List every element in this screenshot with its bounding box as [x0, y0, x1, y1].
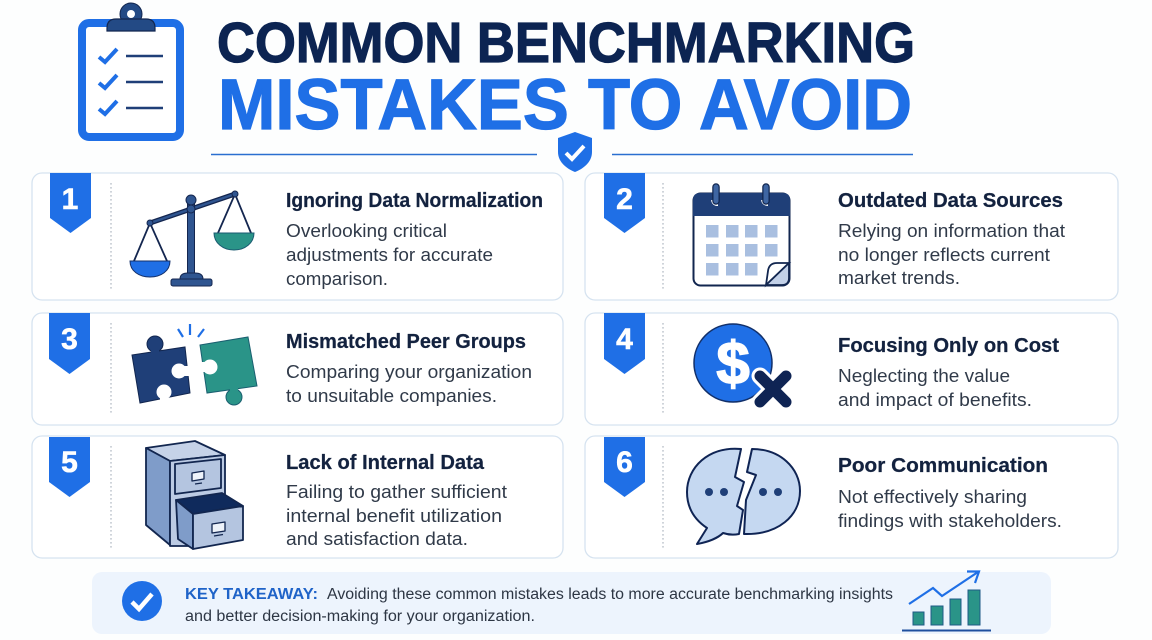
badge 2: 2 [616, 183, 633, 216]
panel: key takeaway [92, 572, 1051, 634]
icon: calendar [693, 187, 790, 286]
icon: clipboard checklist [82, 3, 180, 137]
title [217, 11, 915, 145]
text: key takeaway: and better decision-making for your organization. [185, 608, 535, 625]
title: COMMON BENCHMARKING [217, 11, 915, 75]
badge 2 [604, 173, 645, 233]
badge 1 [50, 173, 91, 233]
badge 5 [49, 437, 90, 497]
panel: mistake 1 [32, 173, 563, 300]
badge 5: 5 [61, 446, 78, 479]
text: key takeaway: KEY TAKEAWAY: [185, 586, 318, 603]
text: mistake 4 [838, 334, 1059, 410]
icon: puzzle pieces [132, 324, 257, 405]
text: mistake 1: adjustments for accurate [286, 245, 493, 265]
text: mistake 5: and satisfaction data. [286, 529, 468, 549]
title divider with shield [211, 132, 913, 172]
text: mistake 5: Lack of Internal Data [286, 451, 485, 474]
icon: dollar with cross: $ [716, 330, 750, 397]
text: mistake 3: to unsuitable companies. [286, 386, 497, 406]
text: mistake 4: Neglecting the value [838, 366, 1010, 386]
badge 3 [49, 313, 90, 374]
text: mistake 1: comparison. [286, 269, 388, 289]
text: key takeaway [185, 586, 893, 625]
icon: shield check [558, 132, 592, 172]
text: mistake 3: Mismatched Peer Groups [286, 330, 526, 353]
icon: check circle [122, 581, 162, 621]
text: mistake 2: Outdated Data Sources [838, 189, 1063, 212]
badge 1: 1 [62, 183, 78, 216]
icon: broken speech bubble [687, 449, 800, 544]
badge 6: 6 [616, 446, 633, 479]
text: mistake 2: no longer reflects current [838, 245, 1050, 265]
badge 4: 4 [616, 323, 633, 356]
text: mistake 1: Overlooking critical [286, 221, 447, 241]
text: key takeaway: Avoiding these common mistakes leads to more accurate benchmarking insights [327, 586, 893, 603]
badge 3: 3 [61, 323, 78, 356]
text: mistake 5 [286, 451, 507, 549]
icon: rising bar chart [902, 572, 991, 630]
text: mistake 3 [286, 330, 532, 406]
badge 6 [604, 437, 645, 497]
text: mistake 3: Comparing your organization [286, 362, 532, 382]
panel: mistake 4 [585, 313, 1118, 425]
badge 4 [604, 313, 645, 374]
icon: balance scale [130, 191, 254, 286]
text: mistake 6: Poor Communication [838, 454, 1048, 477]
text: mistake 2 [838, 189, 1065, 288]
text: mistake 5: internal benefit utilization [286, 506, 502, 526]
text: mistake 1: Ignoring Data Normalization [286, 189, 543, 212]
text: mistake 1 [286, 189, 543, 289]
text: mistake 4: and impact of benefits. [838, 390, 1032, 410]
text: mistake 2: market trends. [838, 268, 960, 288]
panel: mistake 3 [32, 313, 563, 425]
text: mistake 6: Not effectively sharing [838, 487, 1027, 507]
panel: mistake 2 [585, 173, 1118, 300]
icon: dollar with cross [694, 324, 786, 402]
text: mistake 2: Relying on information that [838, 221, 1065, 241]
panel: mistake 6 [585, 436, 1118, 558]
panel: mistake 5 [32, 436, 563, 558]
icon: filing cabinet [146, 441, 243, 549]
text: mistake 6: findings with stakeholders. [838, 511, 1062, 531]
text: mistake 4: Focusing Only on Cost [838, 334, 1059, 357]
text: mistake 5: Failing to gather sufficient [286, 482, 507, 502]
text: mistake 6 [838, 454, 1062, 531]
title: MISTAKES TO AVOID [218, 66, 912, 145]
